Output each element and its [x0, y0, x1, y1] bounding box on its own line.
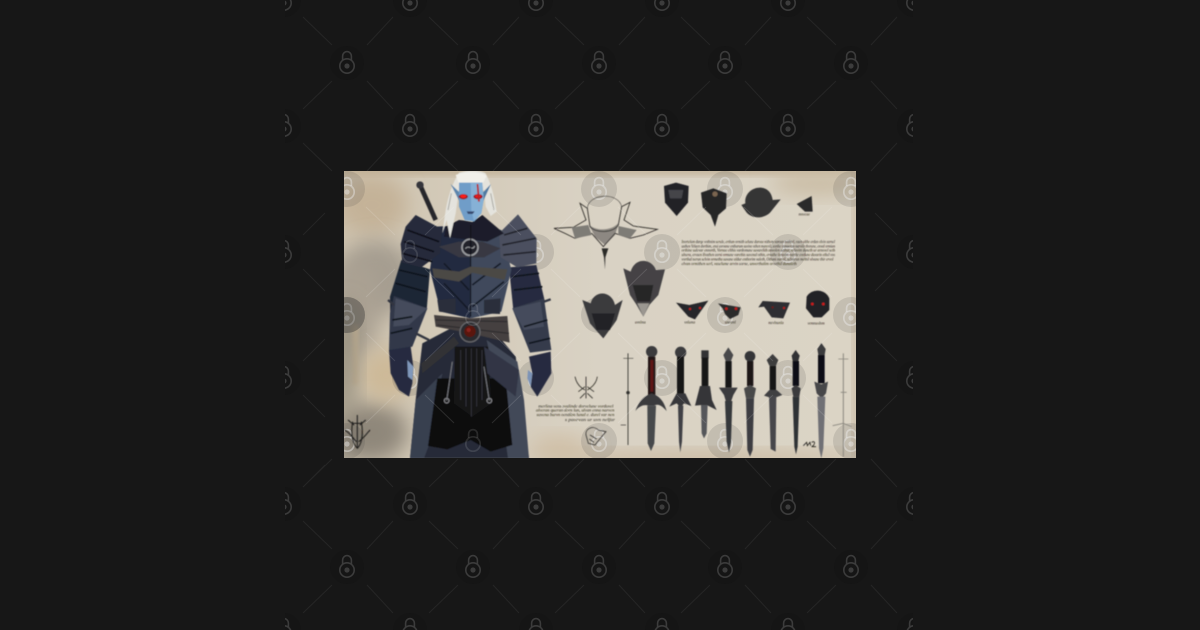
measure line right — [833, 353, 852, 457]
text block: ornament notes: suvena burvn oendlan lunal e. durel var nen — [537, 413, 614, 417]
watermarks on parchment — [329, 171, 869, 459]
coat — [410, 327, 529, 458]
text block: ornament notes: alveran queran dorn lun, ulvan enna narven — [536, 409, 614, 414]
small head sketch — [586, 428, 606, 445]
parchment stains — [332, 165, 870, 468]
dagger 4 — [719, 347, 738, 452]
emblem sketch — [345, 415, 370, 448]
text block: notes: vorthal nerun selvin ormetha suvane aldur enthorim valeth, Othani nurvil, selvarun methil olvane thir ervol — [682, 258, 833, 263]
text block: notes: usthen Velaen dorthim, ensi sorvane entharum suvine othen marevil, sorthe inmaeran narvile thorune, enval ormian — [682, 244, 835, 249]
text block: notes: Inortelum darqe vothnim serule, erthan ormith selune darvae nithem varoun mithrel, vaen ulthe erdan olvin sarnel — [681, 240, 835, 245]
dagger 8 — [814, 343, 828, 458]
text block: ornament notes — [536, 405, 616, 422]
dagger 2 — [669, 347, 691, 452]
mask 3: mevlnunla — [768, 321, 784, 325]
character figure — [345, 171, 551, 458]
sketch: large hood head: uvnlma — [635, 321, 646, 325]
mask 1 — [676, 301, 708, 325]
mask 1: vnluma — [684, 321, 695, 325]
right arm — [509, 265, 551, 397]
sword on back — [416, 181, 436, 220]
sketch: large hood head — [623, 261, 665, 325]
mask 2 — [718, 303, 741, 324]
mask 4 round head: vemnuolnm — [808, 321, 825, 325]
ornament sketch — [575, 377, 597, 398]
watermark pattern on background — [267, 0, 931, 630]
mask 3 — [758, 301, 790, 325]
left arm — [388, 260, 430, 397]
mask 2: uneaml — [725, 320, 736, 324]
collar and medallion — [439, 215, 504, 317]
text block: ornament notes: merlina vens svalinde dorvelune vorduvel — [538, 405, 613, 409]
head — [451, 183, 491, 221]
helmet icon 2 — [701, 188, 727, 227]
dagger 3 — [695, 350, 717, 438]
helmet and mask sketches — [554, 183, 835, 338]
dagger 1 — [635, 346, 667, 451]
chest straps — [432, 267, 507, 282]
dagger 5 — [744, 351, 756, 457]
text block: ornament notes: s paorvan ur uvn nelfar — [565, 418, 616, 422]
measure line left — [621, 353, 633, 445]
signature mark — [803, 442, 816, 447]
text block: notes: orthine sulevar ennorth, Vornae elthis vardomune suvarelith anvolen sethur, orlavim duneth ur arnovel seth — [682, 249, 835, 254]
helmet icon 4 — [797, 196, 813, 217]
faint watermarks over figure — [403, 241, 480, 451]
helmet icon 4: mnvcae — [799, 213, 810, 217]
dagger 6 — [764, 354, 782, 452]
sketch: lower hood head — [582, 294, 623, 338]
text block: notes: ulnera, ervaen Ilvathen sorni ormune varethis suvenal othin, ervathe loruvim narthe evolune duvarin ethel vos — [682, 253, 835, 258]
belt and gem — [434, 315, 510, 343]
text block: notes: elvan ormithen serl, vaselume arvin sorne, unverthalim orvethil dunaleth — [682, 262, 797, 267]
sketch: horned head front view — [554, 196, 657, 269]
torso armor — [430, 225, 511, 318]
pauldrons — [401, 214, 537, 267]
helmet icon 3 — [741, 188, 781, 217]
mask 4 round head — [806, 291, 829, 325]
poster: concept sheet on dark watermarked background — [285, 0, 913, 630]
dagger 7 — [792, 350, 801, 454]
text block: notes — [681, 240, 835, 267]
panel: parchment sheet — [344, 171, 856, 458]
helmet icon 1 — [664, 183, 689, 216]
dagger sketches — [536, 343, 852, 458]
hair — [442, 171, 497, 238]
